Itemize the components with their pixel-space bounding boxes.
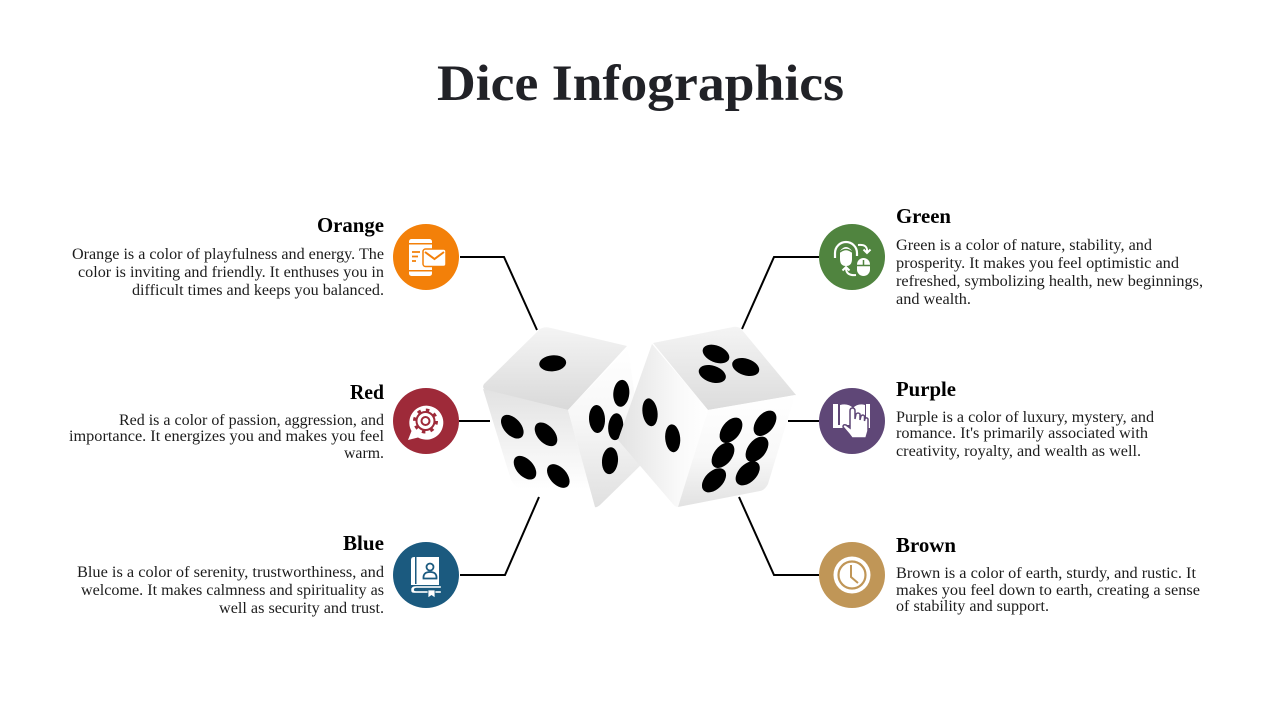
connector: brown [739, 497, 819, 575]
connector: green [742, 257, 819, 329]
icon: brown clock [819, 542, 885, 608]
text block: red: warm. [344, 445, 384, 462]
left die [483, 327, 644, 507]
connector: blue [460, 497, 539, 575]
text block: blue: well as security and trust. [219, 600, 384, 617]
connector: purple [788, 420, 819, 422]
text block: orange: Orange is a color of playfulness and energy. The [72, 246, 384, 263]
text block: blue: Blue is a color of serenity, trustworthiness, and [77, 564, 384, 581]
text block: brown: Brown is a color of earth, sturdy, and rustic. It [896, 565, 1197, 582]
text block: purple: Purple is a color of luxury, mystery, and [896, 409, 1154, 426]
text block: purple [896, 377, 1154, 460]
text block: blue: Blue [343, 531, 384, 555]
text block: purple: romance. It's primarily associated with [896, 425, 1148, 442]
connector: orange [460, 257, 537, 330]
text block: red: Red [350, 380, 384, 404]
text block: orange: difficult times and keeps you balanced. [132, 282, 384, 299]
text block: purple: Purple [896, 377, 956, 401]
text block: brown: of stability and support. [896, 598, 1049, 615]
text block: green: and wealth. [896, 291, 971, 308]
text block: green: refreshed, symbolizing health, new beginnings, [896, 273, 1203, 290]
right die [618, 327, 796, 507]
icon: green headset and mouse [819, 224, 885, 290]
text block: green: Green [896, 204, 951, 228]
text block: orange [72, 213, 384, 299]
icon: orange phone and mail [393, 224, 459, 290]
text block: brown: Brown [896, 533, 956, 557]
icon: purple hand on book [819, 388, 885, 454]
text block: red: importance. It energizes you and makes you feel [69, 428, 384, 445]
text block: orange: color is inviting and friendly. It enthuses you in [78, 264, 384, 281]
text block: blue: welcome. It makes calmness and spirituality as [81, 582, 384, 599]
text block: purple: creativity, royalty, and wealth as well. [896, 443, 1141, 460]
text block: red: Red is a color of passion, aggression, and [119, 412, 384, 429]
text block: brown: makes you feel down to earth, creating a sense [896, 582, 1200, 599]
text block: red [69, 380, 384, 462]
icon: red gear speech bubble [393, 388, 459, 454]
connector: red [459, 420, 490, 422]
text block: orange: Orange [317, 213, 384, 237]
text block: green [896, 204, 1203, 308]
icon: blue address book [393, 542, 459, 608]
text block: brown [896, 533, 1200, 615]
text block: green: prosperity. It makes you feel optimistic and [896, 255, 1179, 272]
text block: blue [77, 531, 384, 617]
text block: green: Green is a color of nature, stability, and [896, 237, 1152, 254]
title: Dice Infographics [437, 56, 844, 112]
